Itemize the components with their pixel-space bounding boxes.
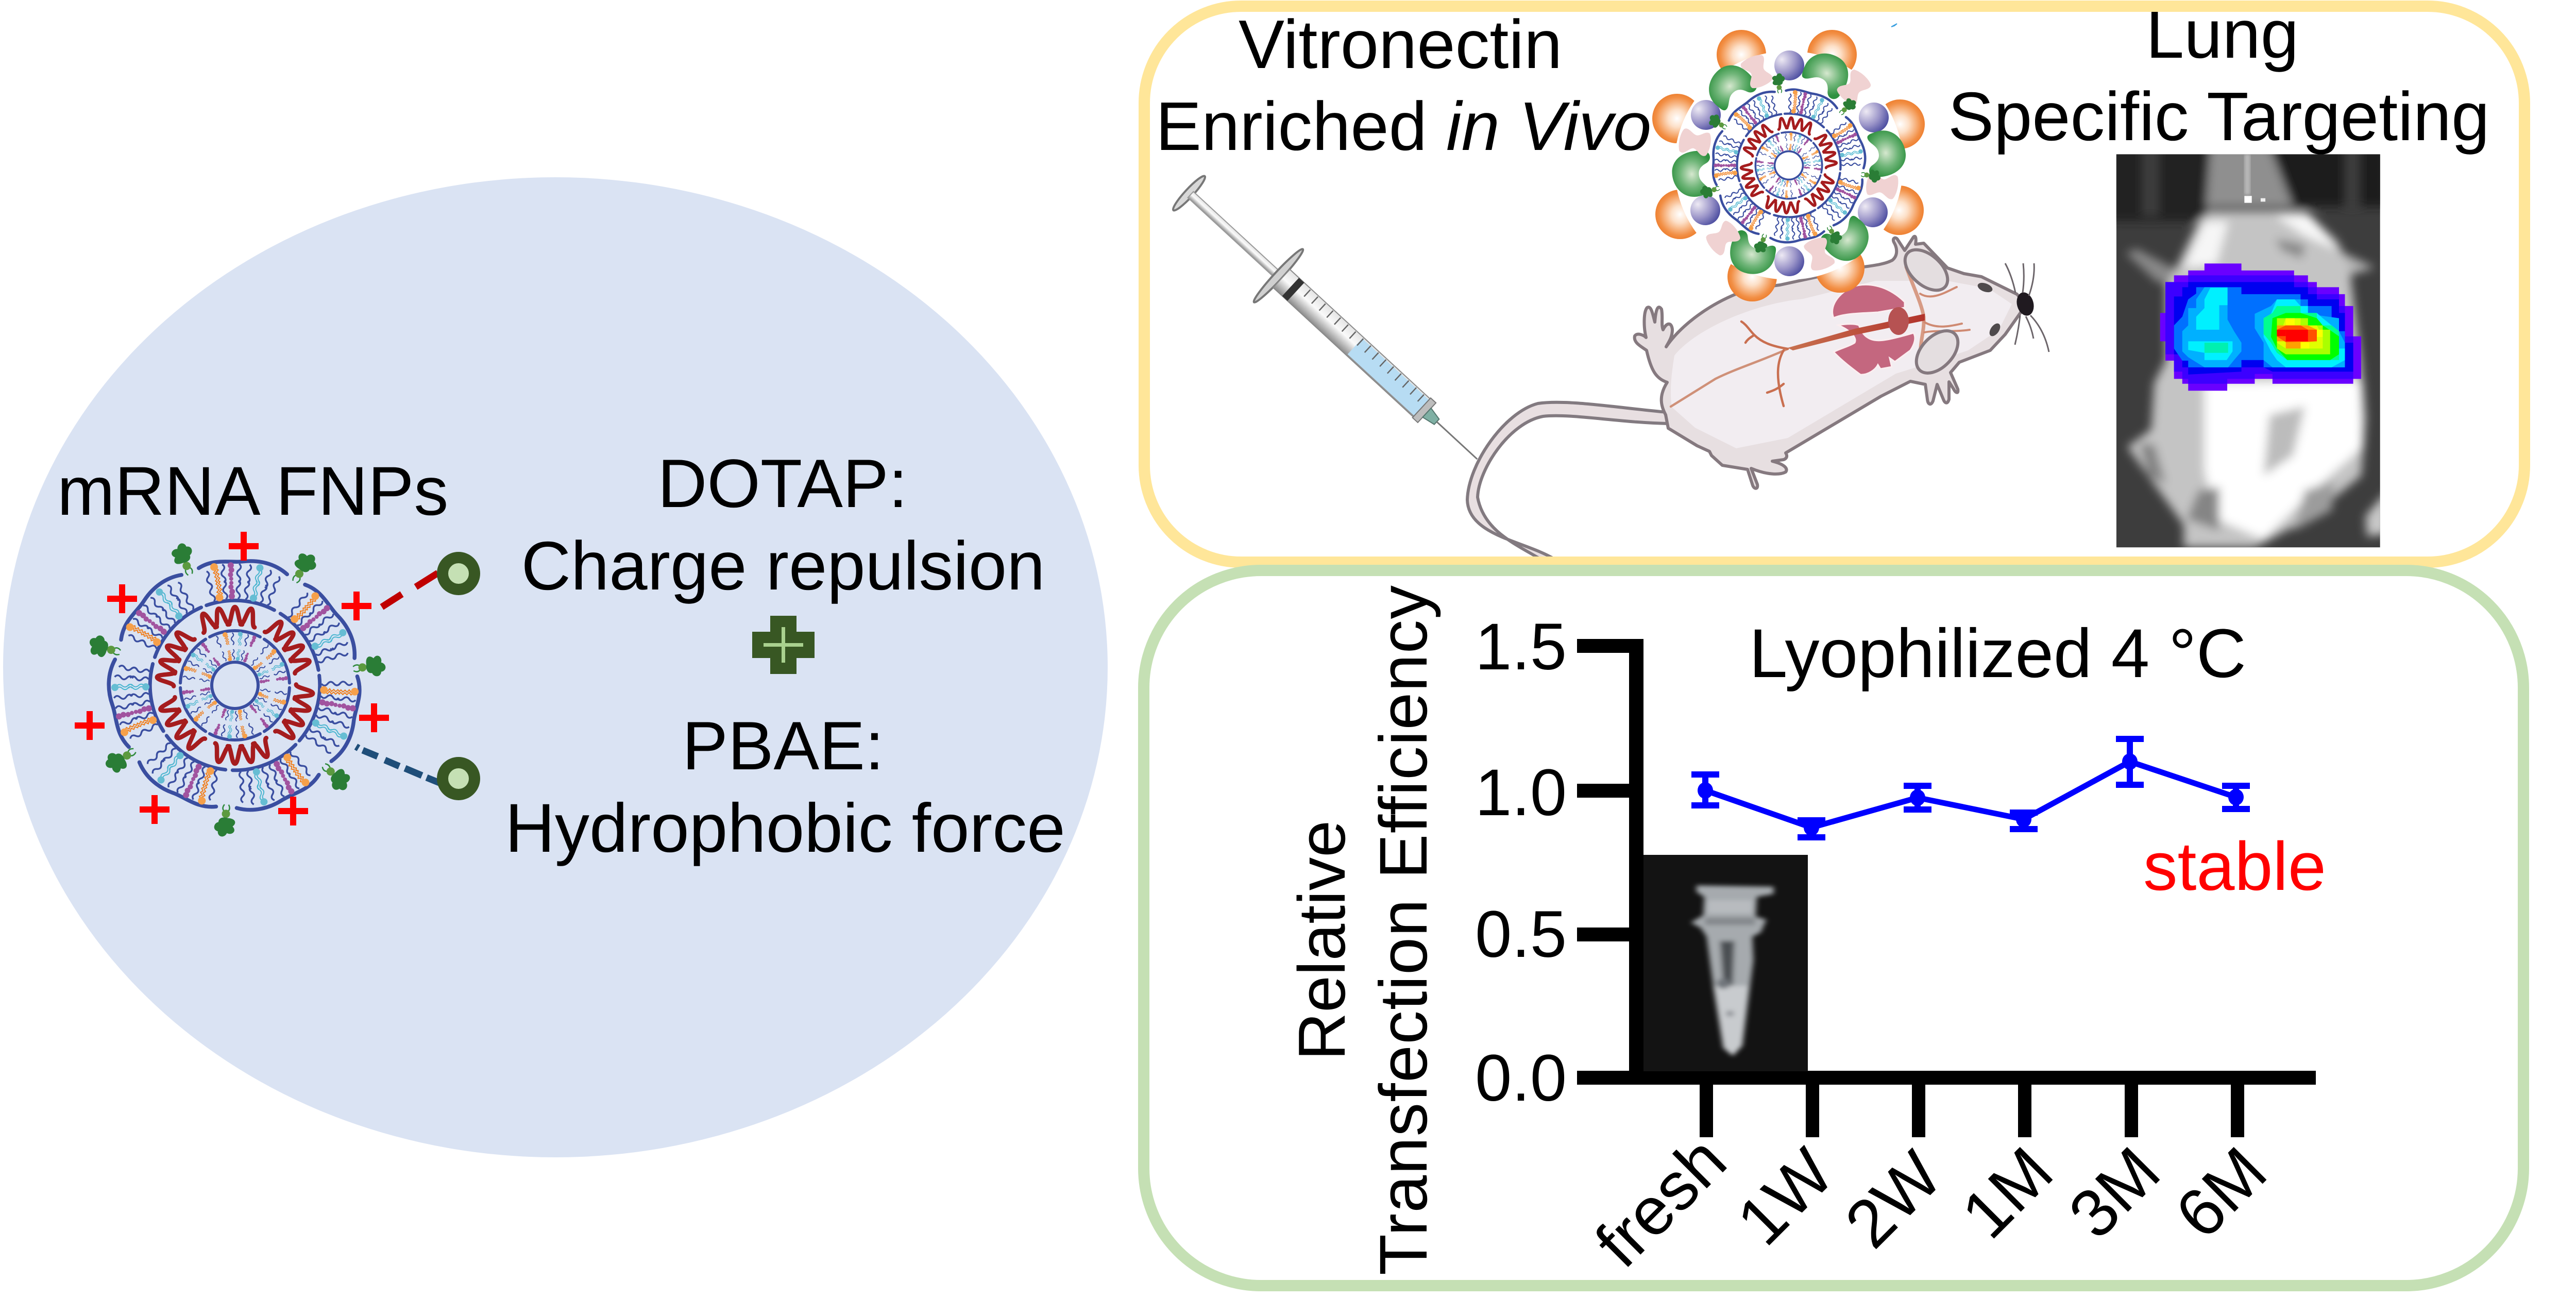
lungs — [1833, 284, 1915, 375]
icon: plus — [752, 616, 815, 674]
data series: line and markers — [1698, 753, 2244, 836]
text: PBAE: PBAE: — [682, 708, 884, 784]
aorta — [1788, 314, 1925, 350]
text: Hydrophobic force: Hydrophobic force — [505, 790, 1065, 867]
panel outline: yellow — [1144, 6, 2524, 562]
y axis tick labels: 1.5 — [1475, 610, 1567, 684]
heart — [1888, 307, 1909, 335]
y axis tick labels: 0.0 — [1475, 1041, 1567, 1115]
y axis title: Transfection Efficiency — [1365, 585, 1441, 1275]
x axis tick labels: 3M — [2054, 1133, 2174, 1252]
heat map — [2160, 263, 2361, 391]
illustration: mouse — [1467, 237, 2049, 559]
nose — [2014, 291, 2036, 317]
panel outline: green — [1144, 570, 2523, 1286]
ears — [1897, 242, 1966, 381]
illustration: protein corona nanoparticle — [1652, 24, 1925, 301]
x axis and ticks — [1577, 1071, 2316, 1137]
icon: syringe — [1162, 164, 1502, 486]
x axis tick labels: 1M — [1947, 1133, 2067, 1252]
y axis tick labels: 1.0 — [1475, 756, 1567, 830]
white corona disc — [1674, 51, 1903, 280]
heading: Vitronectin: Vitronectin — [1239, 6, 1562, 83]
y axis and ticks — [1577, 639, 1643, 1085]
marker: PBAE lipid — [443, 763, 474, 795]
orange proteins — [1652, 30, 1925, 301]
pink proteins — [1677, 52, 1900, 273]
lipid nanoparticle core — [1677, 57, 1901, 279]
stray blue mark — [1891, 24, 1897, 27]
y axis title — [1285, 585, 1441, 1275]
text: Charge repulsion: Charge repulsion — [521, 528, 1045, 604]
ellipse background — [3, 177, 1108, 1157]
x axis tick labels — [1581, 1122, 2281, 1282]
x axis tick labels: 6M — [2161, 1133, 2281, 1252]
panel: in vivo lung targeting — [1144, 0, 2524, 562]
annotation: stable: stable — [2143, 829, 2326, 905]
dashed connector: PBAE — [356, 747, 443, 784]
photo: lyophilized tube — [1643, 855, 1808, 1071]
y axis title: Relative — [1285, 820, 1359, 1060]
purple proteins — [1690, 50, 1889, 276]
marker: DOTAP lipid — [443, 558, 474, 589]
heading: Specific Targeting: Specific Targeting — [1948, 78, 2489, 155]
whiskers — [2005, 263, 2049, 352]
mouse tail — [1467, 402, 1668, 559]
chart title: Lyophilized 4 °C — [1749, 615, 2246, 692]
heading: mRNA FNPs: mRNA FNPs — [57, 453, 448, 530]
green proteins — [1670, 45, 1909, 281]
scan background — [2110, 146, 2388, 547]
text: DOTAP: DOTAP: — [657, 446, 908, 522]
panel: mRNA FNP ellipse — [3, 177, 1108, 1157]
image: bioluminescence mouse scan — [2110, 146, 2388, 547]
y axis tick labels: 0.5 — [1475, 898, 1567, 971]
positive charges — [75, 532, 389, 825]
y axis tick labels — [1475, 610, 1567, 1115]
mouse body — [1635, 237, 2025, 488]
heading: Enriched in Vivo: Enriched in Vivo — [1156, 88, 1651, 165]
x axis tick labels: fresh — [1581, 1122, 1740, 1282]
panel: lyophilized stability chart — [1144, 570, 2523, 1286]
blood vessels — [1671, 267, 1970, 407]
mouse body highlight — [1671, 281, 2012, 448]
eyes — [1976, 281, 2003, 338]
dashed connector: DOTAP — [382, 573, 438, 607]
x axis tick labels: 2W — [1831, 1137, 1956, 1262]
illustration: lipid nanoparticle — [87, 541, 387, 837]
x axis tick labels: 1W — [1722, 1134, 1848, 1259]
data series: error bars — [1691, 736, 2250, 840]
